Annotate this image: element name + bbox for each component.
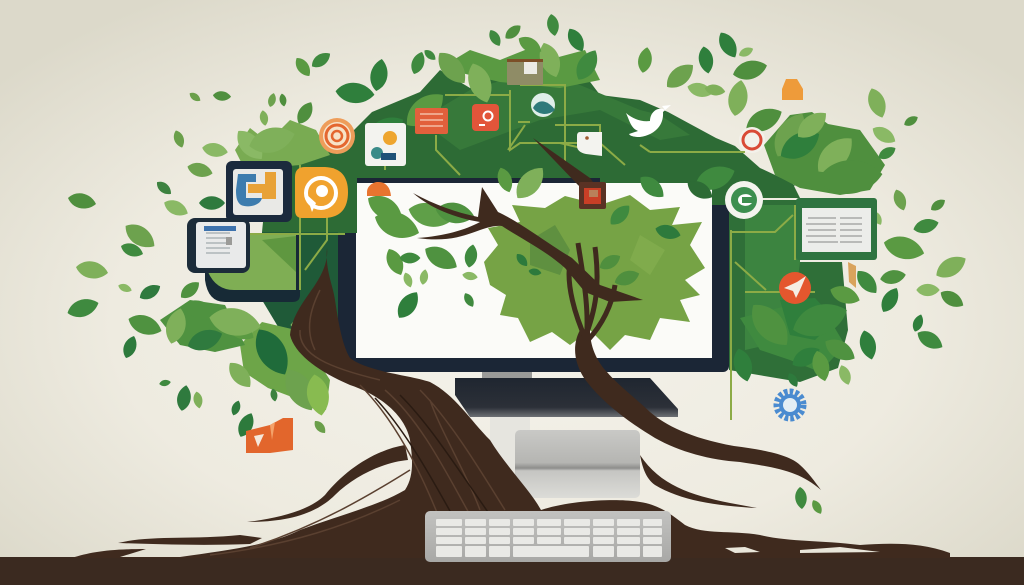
icon: blue gear (777, 392, 803, 418)
monitor stand and base (455, 370, 678, 498)
foliage: over monitor top and screen (363, 161, 738, 322)
keyboard (425, 511, 671, 562)
left panel with leaf card (205, 235, 300, 302)
icon: orange tag (782, 79, 803, 100)
icon: red ring (739, 127, 765, 153)
icon: document card (187, 218, 250, 273)
icon: orange folder (246, 418, 293, 453)
ground (0, 557, 1024, 585)
icon: red tile on branch (579, 182, 606, 209)
foliage: lower right pair (794, 486, 824, 516)
icon: orange fruit (367, 182, 391, 196)
icon: colourful app tile (365, 123, 406, 166)
foliage: upper right cluster (661, 29, 970, 311)
keyboard keys (436, 519, 662, 557)
main tree trunk and roots (72, 248, 950, 558)
icon: olive document tile (507, 59, 543, 85)
icon: green circle badge (725, 181, 763, 219)
icon: twitter bird (626, 105, 671, 137)
icon: teal swirl (531, 93, 555, 117)
icon: document window (796, 198, 877, 260)
foliage masses (160, 48, 885, 410)
icon: orange circle badge (779, 272, 811, 304)
monitor (338, 178, 729, 372)
tree on screen (484, 195, 705, 350)
foliage: upper left cluster (201, 13, 654, 165)
icon: red list tile (415, 108, 448, 134)
foliage: right cluster (730, 266, 946, 389)
icon: speech bubble (577, 132, 602, 156)
branches on screen (413, 138, 821, 490)
icon: orange tag small (848, 262, 856, 288)
green canopy behind monitor (262, 60, 848, 382)
icon: orange refresh badge (295, 167, 348, 218)
icon: chat blocks (226, 161, 292, 222)
circuit lines (245, 85, 815, 420)
foliage: left cluster (65, 90, 332, 440)
icon: red app tile (472, 104, 499, 131)
icon: spiral badge (319, 118, 355, 154)
